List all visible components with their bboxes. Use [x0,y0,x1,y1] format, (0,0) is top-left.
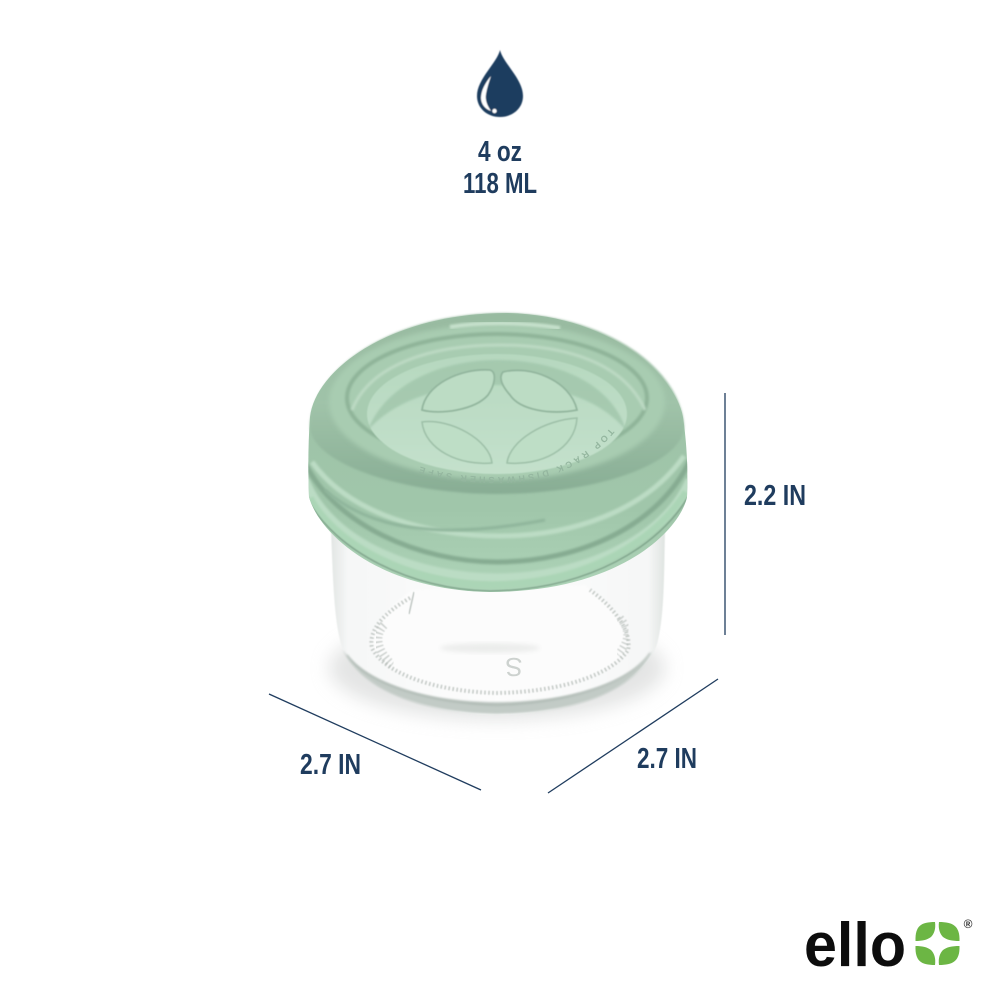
brand logo: ello [804,911,906,980]
height label: 2.2 IN [744,480,806,512]
mould mark: S [505,652,523,682]
right width label: 2.7 IN [637,743,697,775]
logo clover mark [915,922,960,965]
leaf top right [501,370,577,412]
capacity label: 118 ML [463,168,537,200]
wide knurl right [618,618,627,655]
glass jar with base [331,530,665,715]
left width label: 2.7 IN [300,749,361,781]
wide knurl left [378,625,392,665]
glass base thick edge [343,650,653,714]
registered mark: ® [964,917,973,931]
capacity label [463,136,537,200]
lid side bands [305,456,690,591]
infographic canvas [268,50,972,966]
dimension line: left width [269,694,481,790]
rim light ring [352,345,645,410]
soft inner reflection [440,643,540,653]
dimension line: right width [548,679,718,793]
rim shade ring [347,334,647,462]
seam stroke [409,592,414,614]
dotted knurled base ring [371,590,629,693]
leaf bottom right [507,418,577,463]
base dark rim line [347,653,650,705]
capacity label: 4 oz [478,136,522,168]
dimension line: height [724,393,726,635]
lid top rim [310,313,684,494]
rim inner ring light [329,324,665,480]
leaf bottom left [422,422,492,463]
embossed lid text: TOP RACK DISHWASHER SAFE [420,430,614,480]
green lid [308,312,688,592]
jar shadow [329,616,665,720]
inner well [367,354,627,474]
inner well upper shade [368,360,626,430]
icon: water drop [477,50,523,117]
leaf top left [422,370,494,412]
brand logo [804,911,973,980]
rim highlight streak [450,323,560,328]
base inner white disc [371,585,628,693]
